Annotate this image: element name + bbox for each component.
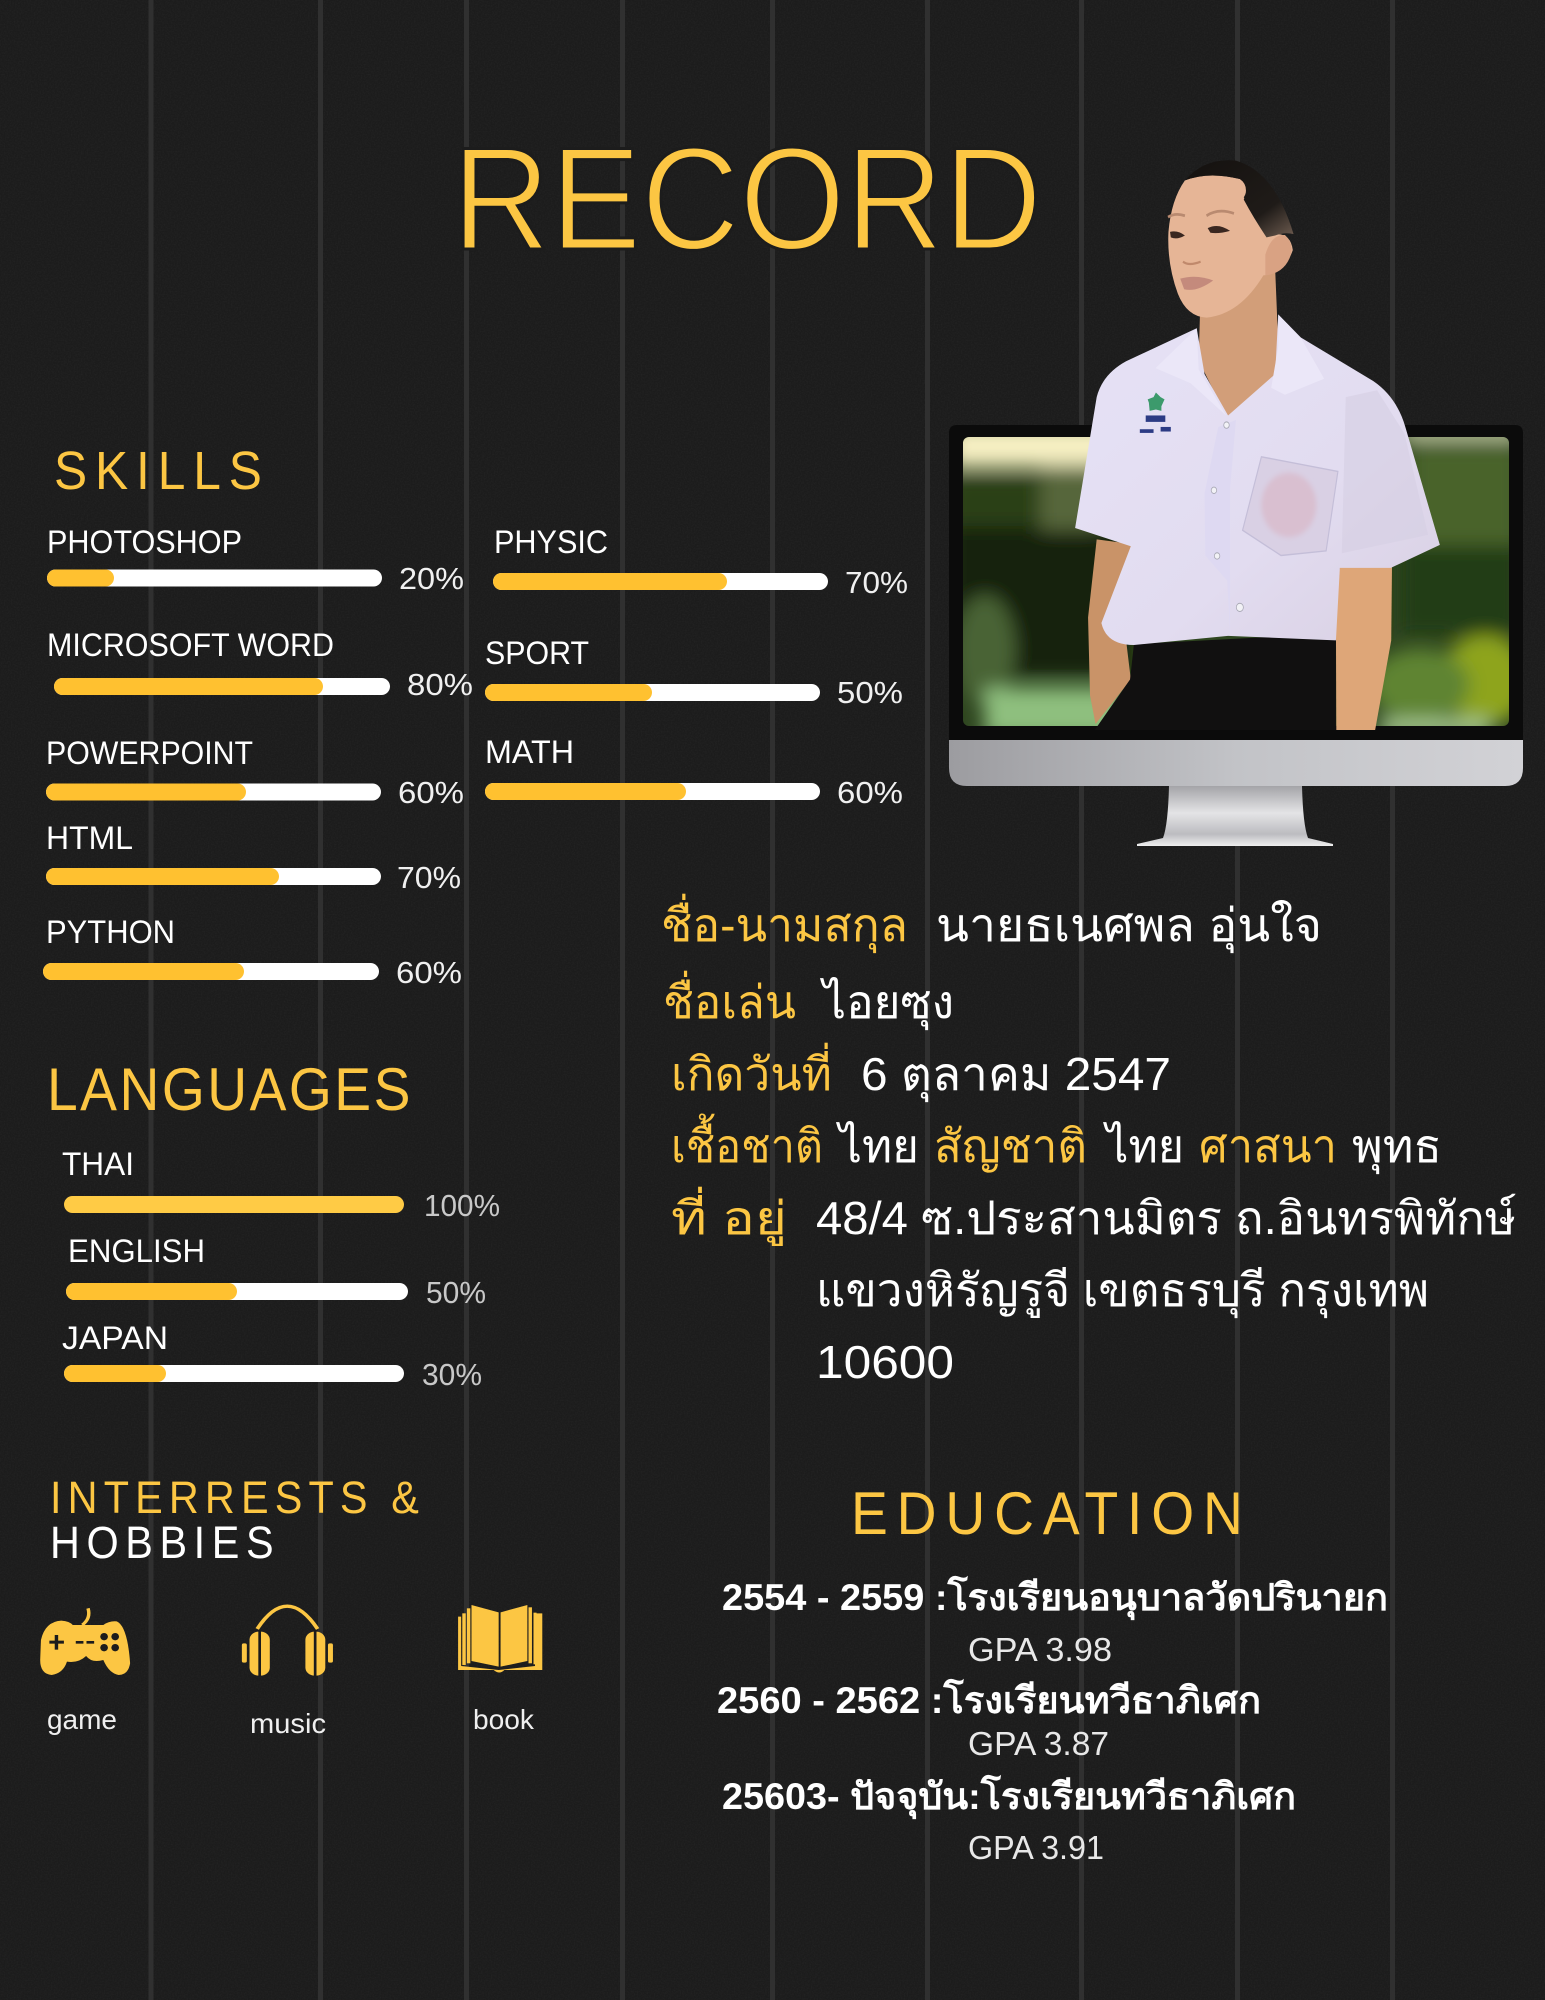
ear [1265, 235, 1292, 275]
education entry 3 [722, 1774, 1296, 1866]
skill: physic: PHYSIC [494, 524, 608, 560]
skill: powerpoint: POWERPOINT [46, 735, 253, 771]
trousers [1095, 634, 1336, 730]
skill: microsoft word: MICROSOFT WORD [47, 627, 334, 663]
neck [1199, 269, 1280, 420]
language: thai: THAI [62, 1146, 134, 1182]
ethnicity, nationality and religion [671, 1113, 1442, 1175]
language: japan [62, 1320, 482, 1392]
birth date: 6 ตุลาคม 2547 [861, 1048, 1171, 1103]
shirt placket [1205, 420, 1236, 634]
shirt collar [1156, 314, 1324, 415]
ethnicity, nationality and religion: สัญชาติ [934, 1120, 1087, 1172]
monitor chin [949, 740, 1523, 786]
education entry 2: GPA 3.87 [968, 1725, 1109, 1762]
sleeve fold shading [1342, 390, 1428, 553]
education entry 1: 2554 - 2559 :โรงเรียนอนุบาลวัดปรินายก [722, 1575, 1388, 1621]
heading: skills: SKILLS [54, 440, 262, 500]
skill: sport [485, 635, 903, 710]
skill: math: MATH [485, 734, 574, 770]
skill: math [485, 734, 903, 810]
nickname: ไอยซุง [819, 976, 954, 1031]
language: japan: JAPAN [62, 1320, 168, 1356]
skill: python: PYTHON [46, 914, 175, 950]
facial details [1168, 211, 1234, 290]
embroidered name [1140, 415, 1171, 433]
address: 48/4 ซ.ประสานมิตร ถ.อินทรพิทักษ์ [816, 1192, 1516, 1244]
education entry 1: GPA 3.98 [968, 1631, 1112, 1668]
icon: game controller [40, 1608, 130, 1675]
skill: html: HTML [46, 820, 133, 856]
skill: powerpoint [46, 735, 464, 810]
address [671, 1186, 1516, 1388]
skill: powerpoint: 60% [398, 775, 464, 810]
education entry 2: 2560 - 2562 :โรงเรียนทวีธาภิเศก [717, 1678, 1261, 1721]
language: thai: 100% [424, 1188, 500, 1223]
skill: physic: 70% [845, 565, 908, 600]
skill: html: 70% [397, 860, 461, 895]
icon: headphones [242, 1606, 333, 1677]
hair [1185, 160, 1294, 237]
left arm [1088, 539, 1132, 724]
personal details [661, 893, 1516, 1388]
heading: education: EDUCATION [851, 1481, 1243, 1548]
right arm [1336, 565, 1392, 730]
nickname: ชื่อเล่น [663, 970, 796, 1028]
heading: interests and hobbies: HOBBIES [50, 1518, 274, 1568]
title: RECORD [452, 117, 1042, 280]
full name: นายธเนศพล อุ่นใจ [936, 899, 1322, 954]
ethnicity, nationality and religion: ไทย [1102, 1120, 1184, 1172]
language: english: ENGLISH [68, 1233, 205, 1269]
heading: interests and hobbies: INTERRESTS & [50, 1473, 419, 1523]
skill: python [43, 914, 462, 990]
skill: html [46, 820, 461, 895]
skill: microsoft word: 80% [407, 667, 473, 702]
language: english [66, 1233, 486, 1310]
address: 10600 [816, 1336, 954, 1388]
education entry 3: 25603- ปัจจุบัน:โรงเรียนทวีธาภิเศก [722, 1774, 1296, 1820]
ethnicity, nationality and religion: พุทธ [1352, 1120, 1442, 1175]
skill: math: 60% [837, 775, 903, 810]
buttons [1211, 422, 1243, 611]
address: ที่ อยู่ [671, 1186, 787, 1246]
birth date: เกิดวันที่ [671, 1042, 832, 1100]
skill: microsoft word [47, 627, 473, 702]
monitor stand [1137, 786, 1333, 846]
full name [661, 893, 1322, 954]
icon: open book [458, 1605, 542, 1672]
full name: ชื่อ-นามสกุล [661, 893, 908, 954]
skill: photoshop [47, 524, 464, 596]
ethnicity, nationality and religion: ไทย [835, 1120, 919, 1172]
skill: physic [493, 524, 908, 600]
school emblem [1148, 393, 1165, 411]
skill: sport: 50% [837, 675, 903, 710]
skill: sport: SPORT [485, 635, 589, 671]
label: book: book [473, 1704, 535, 1735]
heading: interests and hobbies [50, 1473, 419, 1568]
language: japan: 30% [422, 1357, 482, 1392]
ethnicity, nationality and religion: ศาสนา [1199, 1120, 1337, 1172]
ethnicity, nationality and religion: เชื้อชาติ [671, 1113, 823, 1172]
language: english: 50% [426, 1275, 486, 1310]
education entry 1 [722, 1575, 1388, 1668]
education entry 3: GPA 3.91 [968, 1829, 1104, 1866]
skill: photoshop: PHOTOSHOP [47, 524, 242, 560]
shirt [1075, 314, 1440, 645]
address: แขวงหิรัญรูจี เขตธรบุรี กรุงเทพ [816, 1264, 1429, 1319]
birth date [671, 1042, 1171, 1103]
monitor frame [949, 425, 1523, 740]
nickname [663, 970, 954, 1031]
shirt pocket [1243, 457, 1338, 555]
blurred photo on the screen [963, 437, 1509, 726]
person cut-out [1075, 160, 1440, 730]
face [1168, 175, 1293, 318]
pocket contents [1261, 473, 1316, 537]
skill: photoshop: 20% [399, 561, 464, 596]
education entry 2 [717, 1678, 1261, 1762]
label: game: game [47, 1704, 117, 1735]
icons row [40, 1605, 542, 1677]
heading: languages: LANGUAGES [47, 1057, 410, 1124]
language: thai [62, 1146, 500, 1223]
label: music: music [250, 1708, 326, 1739]
monitor with portrait photo [949, 160, 1530, 846]
skill: python: 60% [396, 955, 462, 990]
